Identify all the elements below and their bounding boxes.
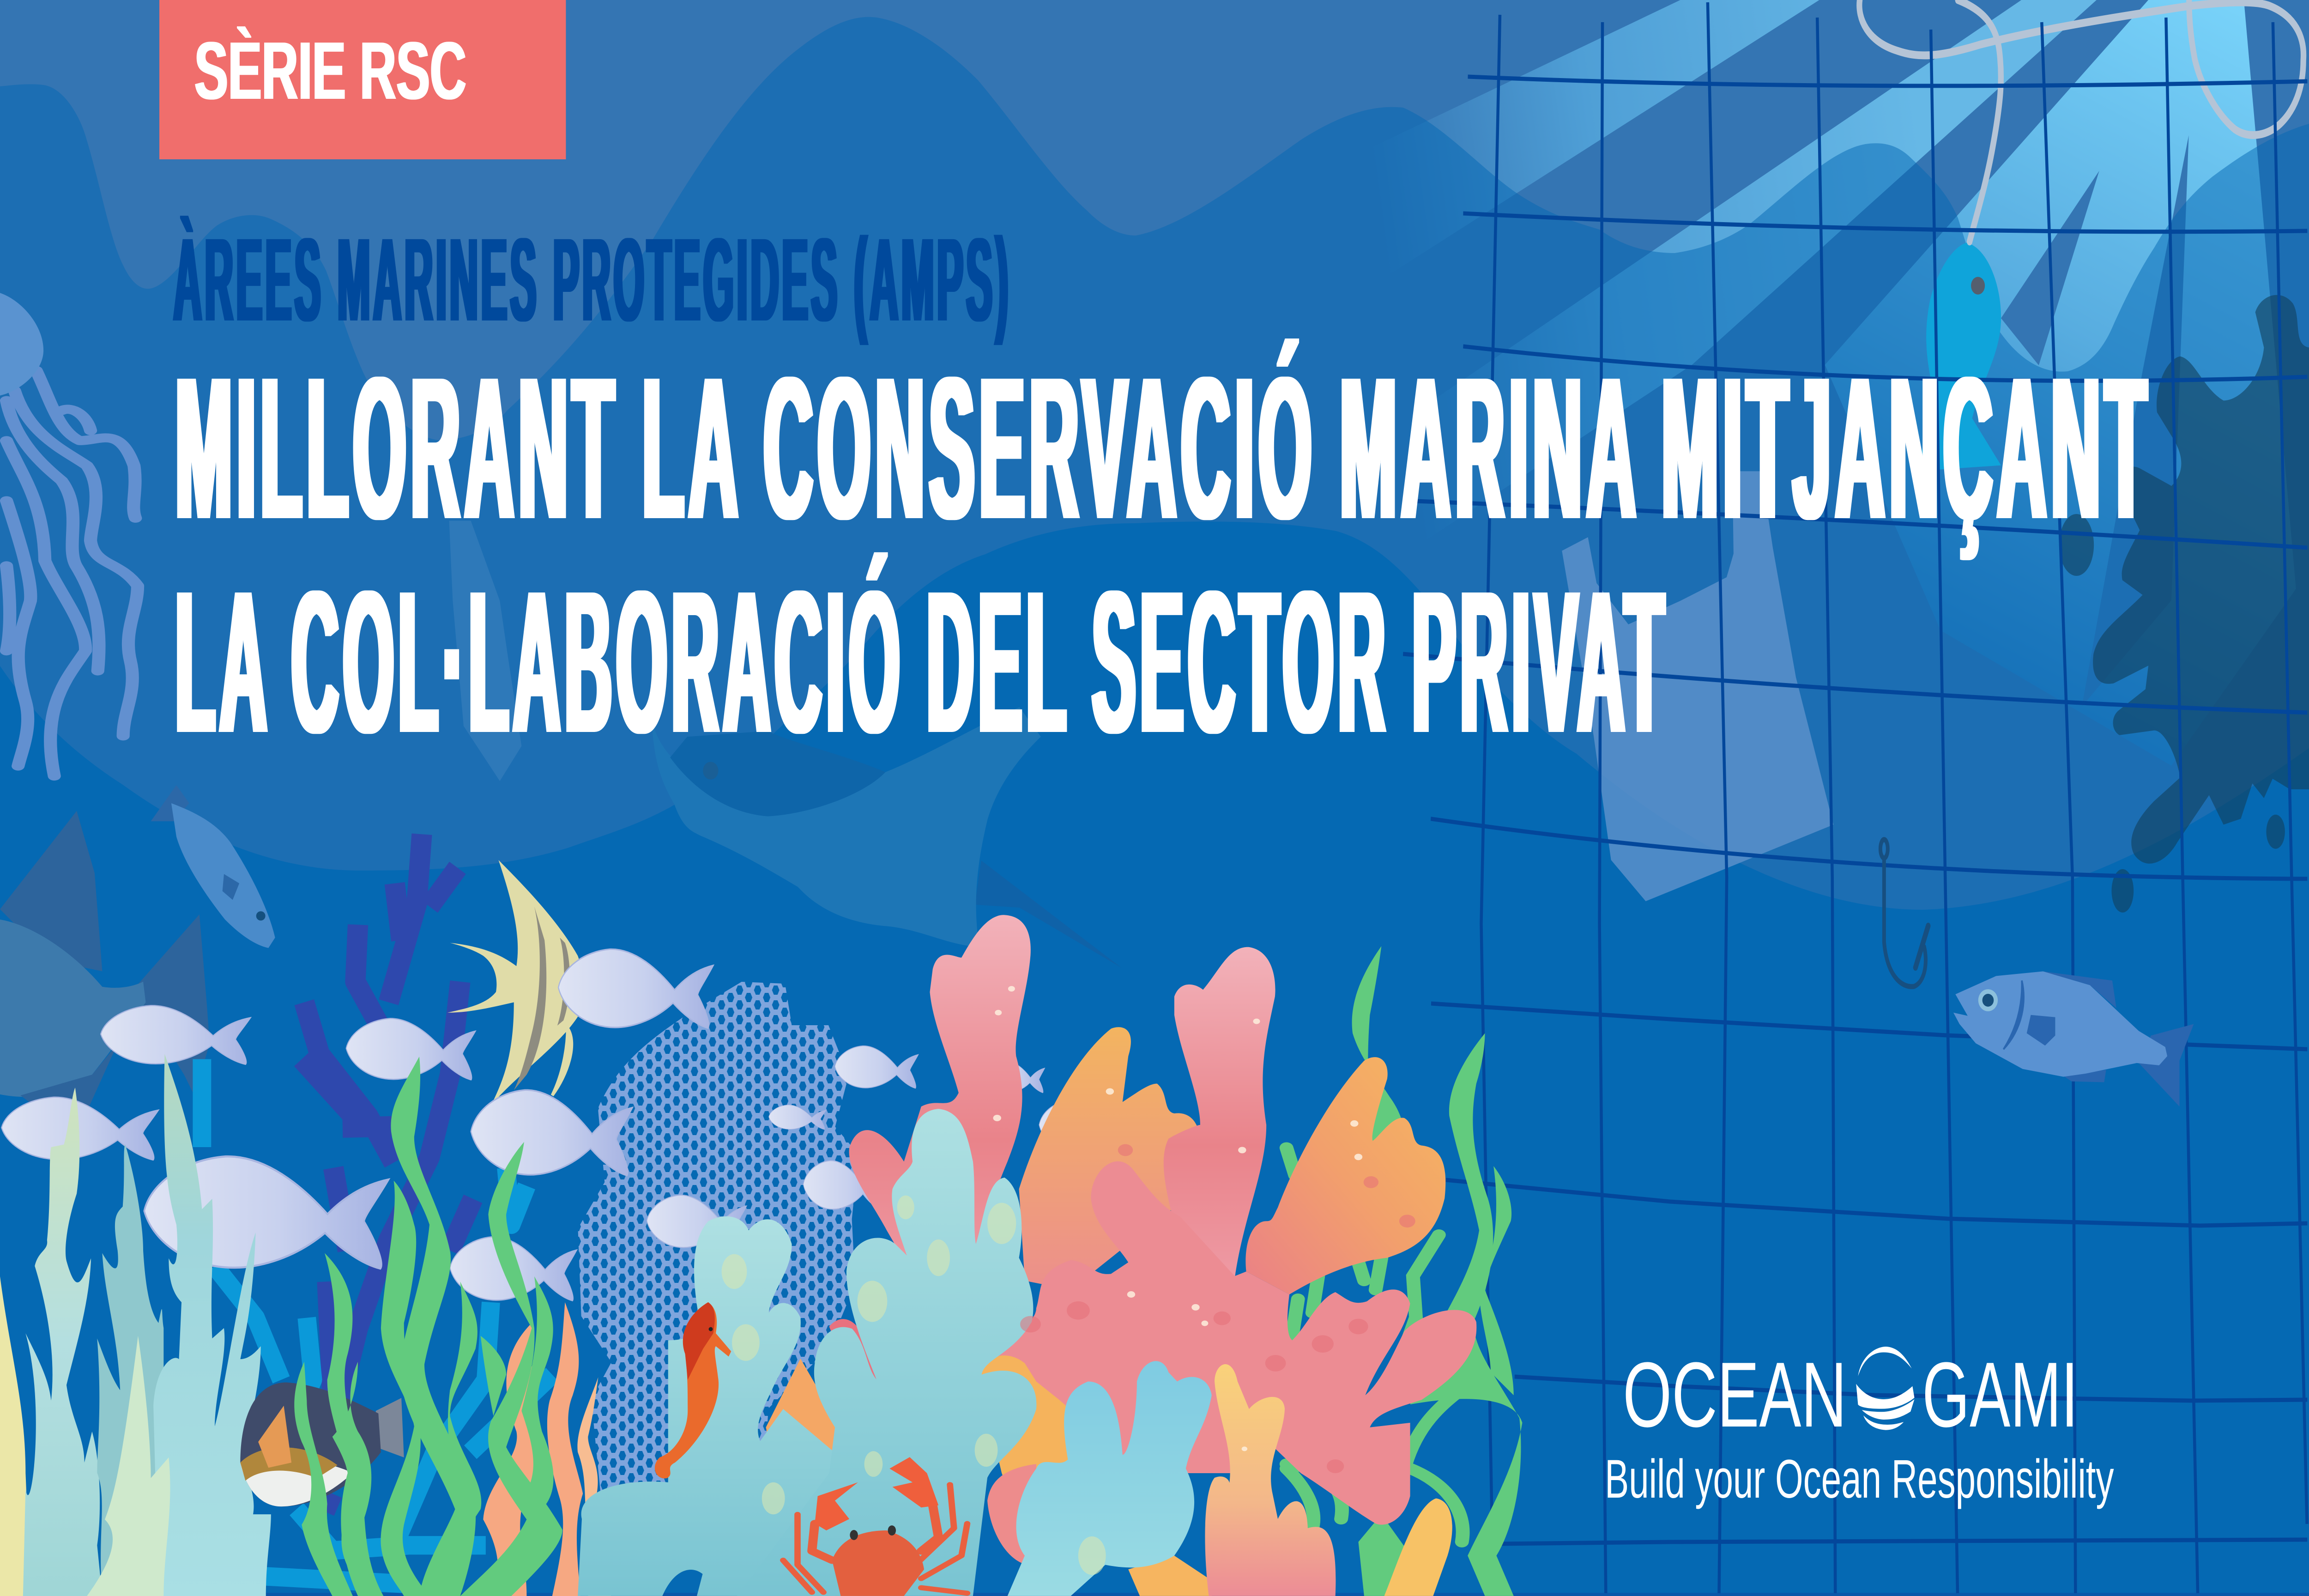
yellow and pink coral	[1205, 1364, 1336, 1596]
sea fan coral	[578, 982, 858, 1524]
orange right branch	[1245, 1057, 1445, 1294]
plastic bag	[1562, 471, 1833, 901]
blue fish in net	[1953, 971, 2194, 1106]
angelfish	[447, 860, 584, 1106]
logo: Oceanogami: GAMI	[1922, 1343, 2078, 1446]
school of silver fish	[1, 949, 747, 1301]
small blue fish	[151, 785, 275, 948]
fishing net	[1403, 2, 2307, 1593]
triggerfish	[240, 1382, 404, 1506]
jellyfish	[0, 293, 138, 776]
pink lower left coral	[987, 1464, 1036, 1565]
big patterned fish	[0, 811, 210, 1106]
coral spots	[722, 986, 1415, 1575]
logo tagline: Build your Ocean Responsibility	[1605, 1448, 2114, 1509]
crab	[783, 1457, 967, 1596]
green kelp right	[1287, 946, 1522, 1596]
orange back coral	[1019, 1027, 1200, 1290]
orange back lobe	[766, 1359, 910, 1596]
pink central coral	[1164, 947, 1275, 1278]
faint squid silhouette	[449, 521, 521, 781]
oil spill	[2059, 295, 2309, 913]
seahorse	[655, 1302, 731, 1478]
coral reef	[578, 915, 1476, 1596]
dark blue branching coral	[302, 834, 473, 1511]
small fish near the coral	[769, 1046, 1125, 1209]
text: ÀREES MARINES PROTEGIDES (AMPS)	[173, 214, 1011, 346]
orange bottom coral	[1128, 1556, 1212, 1596]
title	[175, 335, 2152, 775]
green kelp left	[294, 1057, 562, 1596]
pale sea anemone corals	[0, 1054, 271, 1596]
manta ray silhouette	[651, 707, 1122, 968]
yellow coral tip	[1384, 1499, 1452, 1596]
small pink lobe	[829, 1319, 912, 1433]
logo: Oceanogami: OCEAN	[1623, 1343, 1847, 1446]
logo wave icon	[1856, 1347, 1915, 1430]
blue coral center	[737, 1109, 1036, 1596]
pink tall coral	[849, 915, 1031, 1290]
cyan branching coral	[202, 1059, 552, 1584]
light beams from the surface	[1356, 0, 2296, 766]
pink coral body	[990, 1161, 1476, 1525]
wave layer lower	[0, 521, 2309, 1596]
hanging blue fish	[1914, 243, 2001, 471]
fishing hook	[1880, 840, 1928, 986]
blue coral right	[1008, 1361, 1212, 1596]
orange lower coral	[979, 1355, 1128, 1565]
blue coral left	[578, 1216, 835, 1596]
logo: Oceanogami	[1605, 1343, 2114, 1509]
orange seaweed	[483, 1302, 612, 1596]
fishing line	[1859, 0, 2303, 242]
series badge	[159, 0, 566, 159]
badge label: SÈRIE RSC	[194, 25, 466, 116]
